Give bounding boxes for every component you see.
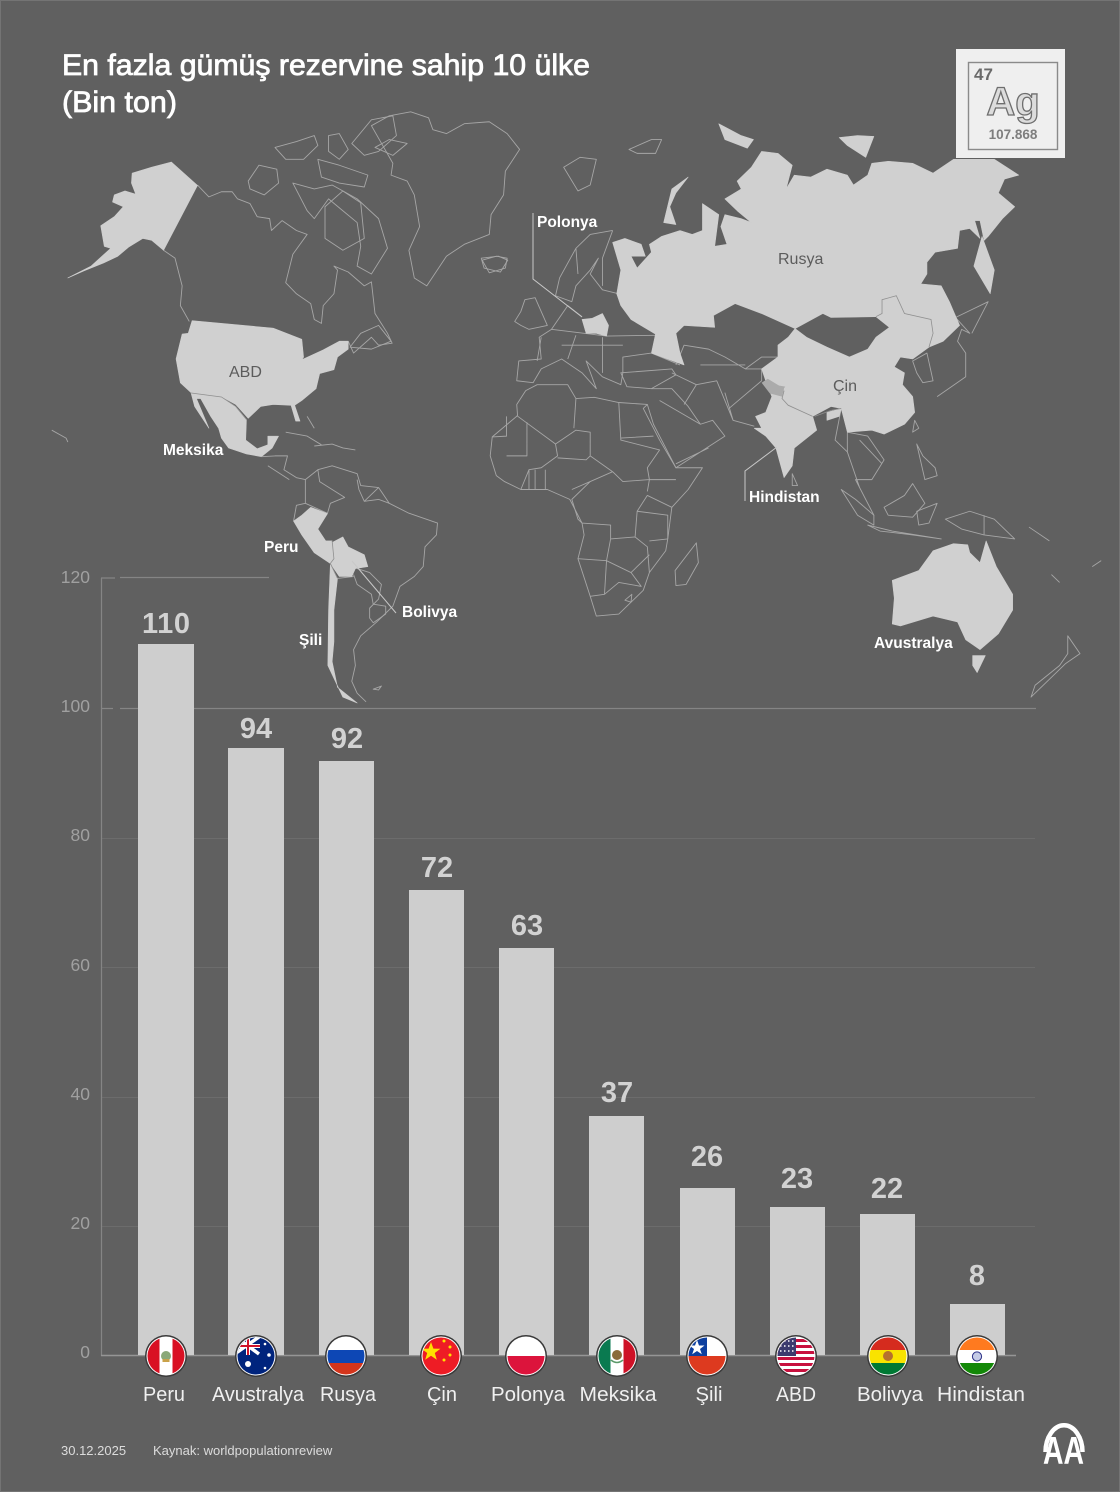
axis labels — [61, 567, 90, 1362]
axis labels: 20 — [71, 1213, 90, 1233]
outlines: South America — [294, 466, 437, 702]
flag: Peru — [145, 1335, 187, 1377]
country labels: Çin — [427, 1383, 457, 1406]
flag: India — [956, 1335, 998, 1377]
axis labels: 60 — [71, 955, 90, 975]
map: Eurasia Africa Oceania — [481, 124, 1101, 697]
label: Polonya — [533, 213, 598, 317]
country labels: Bolivya — [857, 1383, 924, 1406]
values: 94 — [240, 713, 272, 745]
country labels: Hindistan — [937, 1383, 1025, 1406]
values: 8 — [969, 1260, 985, 1292]
label: Meksika: Meksika — [163, 442, 224, 459]
footer source: Kaynak: worldpopulationreview — [153, 1443, 333, 1458]
values: 63 — [511, 910, 543, 942]
silver element card: 47 — [974, 65, 993, 84]
country labels: Avustralya — [212, 1383, 305, 1406]
axis labels: 0 — [80, 1342, 90, 1362]
AA logo: AA — [1043, 1430, 1084, 1473]
border: USA Mexico — [191, 393, 246, 420]
flag: Russia — [325, 1335, 367, 1377]
country labels — [143, 1383, 1025, 1406]
silver element card: Ag — [986, 80, 1040, 124]
flag: USA — [775, 1335, 817, 1377]
outlines: Africa — [490, 385, 702, 616]
footer date: 30.12.2025 — [61, 1443, 126, 1458]
label: Bolivya — [352, 561, 458, 621]
gridlines — [101, 578, 1036, 1356]
label: Hindistan — [745, 447, 820, 506]
label: Avustralya: Avustralya — [874, 635, 953, 652]
country labels: Rusya — [320, 1383, 377, 1406]
label: Polonya: Polonya — [537, 214, 598, 231]
label: Peru: Peru — [264, 539, 298, 556]
country: Tasmania — [973, 656, 985, 673]
flag: Australia — [235, 1335, 277, 1377]
country labels: Şili — [696, 1383, 722, 1406]
border: India China — [782, 391, 841, 416]
flag: Poland — [505, 1335, 547, 1377]
values: 22 — [871, 1173, 903, 1205]
country labels: Polonya — [491, 1383, 566, 1406]
country: Chile — [328, 565, 357, 703]
country labels: Peru — [143, 1383, 185, 1406]
country: Mexico — [191, 393, 279, 457]
country labels: Meksika — [580, 1383, 657, 1406]
outlines: Central America and Caribbean — [52, 416, 355, 480]
flag: Mexico — [596, 1335, 638, 1377]
country: USA — [176, 321, 348, 421]
map: Americas — [52, 112, 520, 703]
label: Bolivya: Bolivya — [402, 604, 458, 621]
outlines: Canada and Greenland — [164, 112, 520, 353]
axis labels: 120 — [61, 567, 90, 587]
bars — [138, 644, 1005, 1355]
country: Russia — [613, 151, 1019, 365]
AA logo — [1043, 1425, 1084, 1473]
values: 92 — [331, 723, 363, 755]
values: 23 — [781, 1163, 813, 1195]
country: Bolivia — [330, 537, 368, 576]
country labels: ABD — [776, 1383, 816, 1406]
title: (Bin ton) — [62, 86, 177, 119]
outlines: Asia and Pacific — [792, 302, 1101, 697]
axis labels: 40 — [71, 1084, 90, 1104]
label: Rusya: Rusya — [778, 251, 823, 268]
title: En fazla gümüş rezervine sahip 10 ülke — [62, 49, 590, 82]
label: ABD: ABD — [229, 364, 262, 381]
disputed area: Kashmir — [762, 379, 785, 397]
country: China — [762, 296, 933, 434]
country: Alaska — [68, 162, 197, 278]
title — [62, 49, 590, 119]
axis labels: 80 — [71, 825, 90, 845]
silver element card: 107.868 — [989, 127, 1038, 142]
values: 110 — [142, 608, 190, 640]
outlines: Europe and Middle East — [481, 140, 778, 468]
border: Peru Bolivia — [330, 541, 337, 578]
border: Russia China — [876, 296, 933, 347]
world map — [52, 112, 1101, 703]
russia islands — [664, 124, 994, 294]
values — [142, 608, 985, 1292]
country: India — [754, 382, 841, 478]
values: 37 — [601, 1077, 633, 1109]
values: 26 — [691, 1141, 723, 1173]
silver element card — [956, 49, 1065, 158]
country: Poland — [582, 314, 609, 336]
axis labels: 100 — [61, 696, 90, 716]
flag: China — [420, 1335, 462, 1377]
label: Hindistan: Hindistan — [749, 489, 820, 506]
flag: Chile — [686, 1335, 728, 1377]
country: Australia — [892, 541, 1013, 650]
flag: Bolivia — [867, 1335, 909, 1377]
values: 72 — [421, 852, 453, 884]
bar chart — [61, 567, 1036, 1362]
label: Şili: Şili — [299, 632, 322, 649]
country: Peru — [294, 507, 334, 563]
label: Çin: Çin — [833, 378, 857, 395]
